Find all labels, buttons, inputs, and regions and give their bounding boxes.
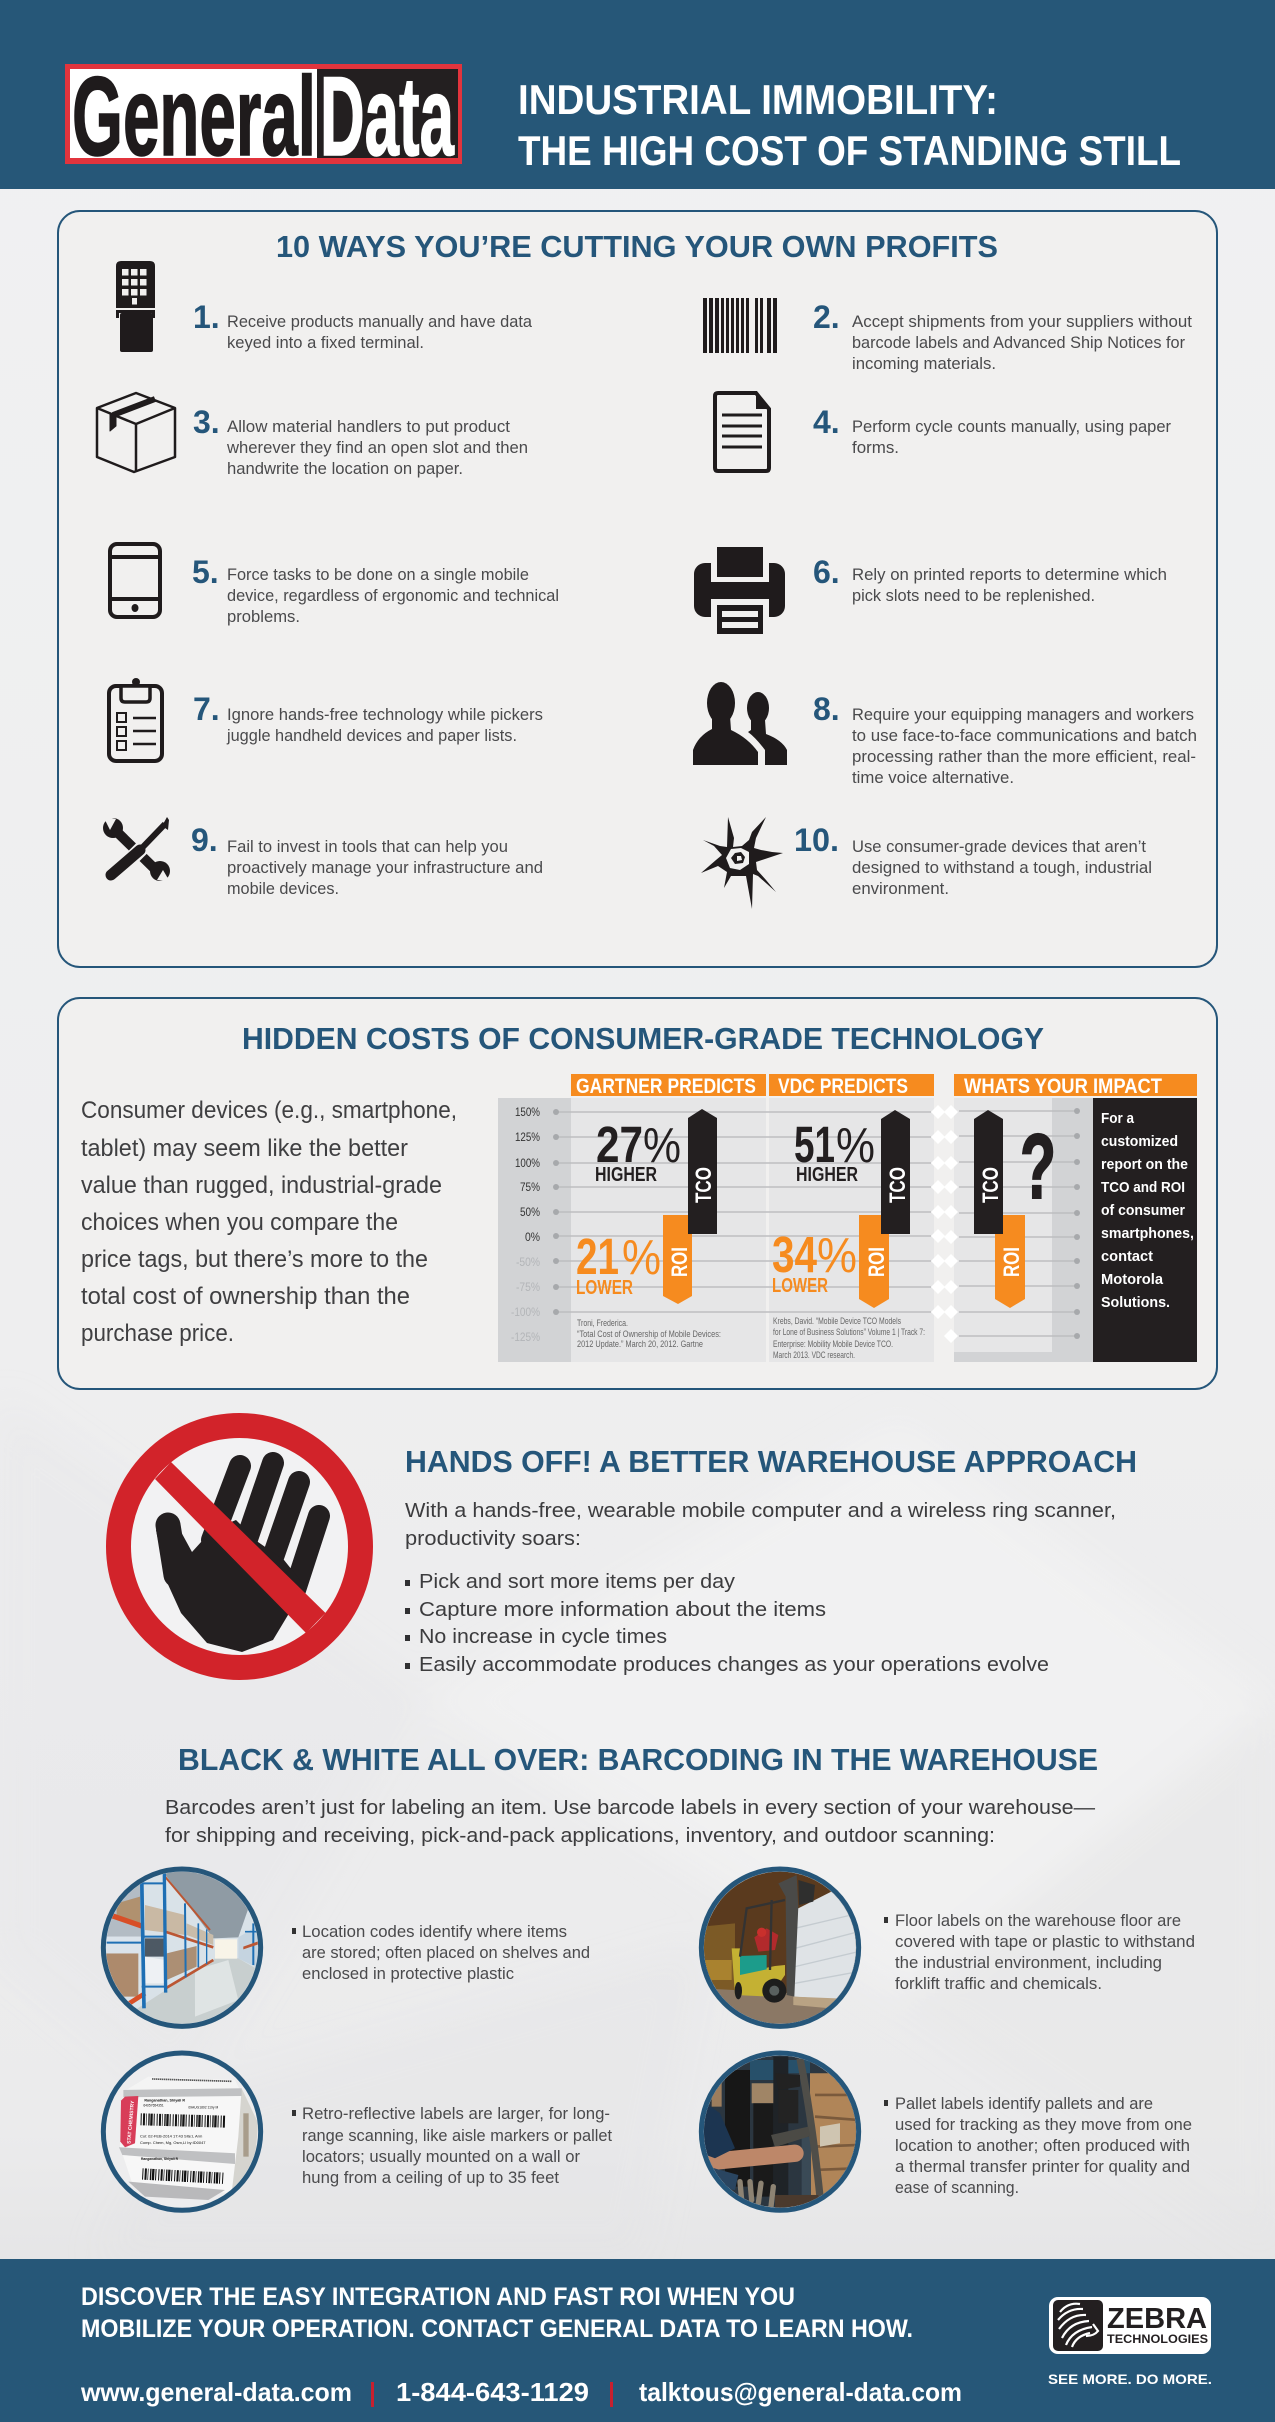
Gartner 27% higher: HIGHER [595,1164,657,1186]
item 3: Allow material handlers to put product [227,418,510,436]
text block: consumer devices [81,1097,457,1347]
icon: mobile device [110,544,160,617]
heading: hidden costs: HIDDEN COSTS OF CONSUMER-GRADE TECHNOLOGY [242,1021,1044,1056]
axis labels: 50% [520,1207,540,1219]
Gartner ROI bar: ROI [667,1247,692,1277]
VDC source: for Lone of Business Solutions” Volume 1 | Track 7: [773,1327,925,1338]
callout: customized report: contact [1101,1248,1153,1265]
VDC source [773,1316,925,1361]
Gartner TCO bar: TCO [691,1167,716,1203]
item 5: device, regardless of ergonomic and technical [227,587,559,605]
photo: barcode label roll: 09AUG1892 119y M [188,2105,218,2109]
VDC 51% higher: HIGHER [796,1164,858,1186]
logo: Zebra Technologies [1049,2297,1211,2354]
text block: consumer devices: tablet) may seem like the better [81,1135,408,1162]
icon: clipboard [109,678,162,761]
icon: box [97,393,175,472]
VDC 34% lower: % [817,1229,857,1283]
floor labels text [884,1912,1195,1993]
photo: warehouse aisle [103,1869,262,2027]
item 2: incoming materials. [852,355,996,373]
column headers: WHATS YOUR IMPACT [964,1075,1162,1098]
VDC source: Enterprise: Mobility Mobile Device TCO. [773,1339,893,1350]
item 3: handwrite the location on paper. [227,460,463,478]
contact details: 1-844-643-1129 [396,2377,589,2407]
bullet list: Easily accommodate produces changes as your operations evolve [419,1654,1049,1676]
photo: hand-held scanner [701,2053,859,2212]
VDC 51% higher: 51 [794,1116,835,1173]
Gartner 21% lower [576,1228,661,1299]
item 1 [193,299,533,352]
item 10: 10. [794,822,839,858]
ring [701,1869,859,2026]
section: hands off [118,1426,1137,1676]
text block: consumer devices: total cost of ownership than the [81,1283,410,1310]
photo: barcode label roll: 64057654351 [143,2104,164,2108]
callout: customized report: Solutions. [1101,1294,1170,1311]
item 4: forms. [852,439,899,457]
axis labels: 75% [520,1182,540,1194]
item 10: Use consumer-grade devices that aren’t [852,838,1146,856]
heading: 10 ways: 10 WAYS YOU’RE CUTTING YOUR OWN PROFITS [276,229,998,264]
call to action: DISCOVER THE EASY INTEGRATION AND FAST ROI WHEN YOU [81,2283,795,2311]
Gartner source: 2012 Update.” March 20, 2012. Gartne [577,1339,703,1350]
icon: fixed terminal [116,261,155,352]
text block: intro [405,1500,1116,1550]
Gartner ROI bar [663,1215,692,1304]
axis labels: -75% [516,1282,540,1294]
item 6: 6. [813,554,840,590]
chart: TCO and ROI comparison [498,1074,1197,1362]
pallet labels text: used for tracking as they move from one [895,2116,1192,2134]
panel: hidden costs [58,998,1217,1389]
column headers [571,1074,1197,1098]
logo: General Data: General [72,54,316,179]
item 9: mobile devices. [227,880,339,898]
text block: consumer devices: purchase price. [81,1320,234,1347]
item 8: time voice alternative. [852,769,1014,787]
VDC 34% lower [772,1226,857,1297]
floor labels text: forklift traffic and chemicals. [895,1975,1102,1993]
VDC ROI bar [859,1215,889,1308]
impact TCO bar [974,1110,1003,1234]
Gartner 27% higher: % [643,1119,681,1173]
impact ROI bar: ROI [999,1247,1024,1277]
axis labels: -50% [516,1257,540,1269]
floor labels text: Floor labels on the warehouse floor are [895,1912,1181,1930]
item 7: 7. [193,691,220,727]
floor labels text: covered with tape or plastic to withstand [895,1933,1195,1951]
item 3: wherever they find an open slot and then [226,439,528,457]
VDC ROI bar: ROI [864,1247,889,1277]
axis labels: 150% [515,1107,540,1119]
photo: barcode label roll: Ranganathan, Shiyali R [144,2099,185,2103]
ring [701,2053,859,2210]
pallet labels text [884,2095,1192,2197]
callout: customized report: For a [1101,1110,1135,1127]
item 10: environment. [852,880,949,898]
bullet list: Pick and sort more items per day [419,1571,735,1593]
Gartner 21% lower: % [622,1231,661,1285]
item 8: to use face-to-face communications and batch [852,727,1197,745]
panel: 10 ways [58,211,1217,967]
icon: zebra head [1058,2304,1098,2347]
bullet list: Capture more information about the items [419,1599,826,1621]
Gartner TCO bar [688,1109,717,1234]
axis labels: -125% [511,1332,540,1344]
item 7 [193,691,543,745]
text block: consumer devices: price tags, but there’s more to the [81,1246,428,1273]
photo: barcode label roll: Ranganathan, Shiyali R [141,2157,179,2161]
photo: barcode label roll: Col: 02-FEB-2014 17:43 Site:L Arm [140,2133,203,2138]
Gartner source: Troni, Frederica. [577,1318,628,1329]
bullet list: No increase in cycle times [419,1626,667,1648]
axis labels: 125% [515,1132,540,1144]
ring [103,1869,261,2026]
item 6: pick slots need to be replenished. [852,587,1095,605]
retro-reflective labels text: locators; usually mounted on a wall or [302,2148,581,2166]
item 5 [192,554,559,626]
photo: barcode label roll [103,2053,262,2212]
logo: Zebra Technologies: ZEBRA [1107,2303,1207,2335]
title: THE HIGH COST OF STANDING STILL [518,127,1181,174]
item 1: keyed into a fixed terminal. [227,334,424,352]
icon: no hands sign [118,1426,360,1668]
pallet labels text: ease of scanning. [895,2179,1019,2197]
text block: consumer devices: choices when you compare the [81,1209,398,1236]
item 9 [191,822,543,898]
heading: hands off: HANDS OFF! A BETTER WAREHOUSE APPROACH [405,1444,1137,1479]
item 7: Ignore hands-free technology while pickers [227,706,543,724]
text block: barcodes intro: Barcodes aren’t just for labeling an item. Use barcode labels in every section of your warehouse— [165,1797,1095,1819]
icon: tools [103,816,170,882]
item 10: designed to withstand a tough, industrial [852,859,1152,877]
item 2: barcode labels and Advanced Ship Notices for [852,334,1185,352]
icon: document [715,393,769,471]
logo: General Data: Data [320,54,454,179]
VDC 51% higher [794,1116,875,1186]
axis labels: 0% [525,1232,540,1244]
retro-reflective labels text: hung from a ceiling of up to 35 feet [302,2169,559,2187]
question mark: ? [1020,1116,1056,1218]
location codes text: enclosed in protective plastic [302,1965,514,1983]
Gartner 27% higher [595,1116,681,1186]
header band [0,0,1275,189]
item 8: processing rather than the more efficient, real- [852,748,1196,766]
icon: printer [694,547,785,634]
callout: customized report: Motorola [1101,1271,1164,1288]
contact details [80,2377,962,2407]
callout: customized report [1093,1098,1197,1362]
callout: customized report: customized [1101,1133,1178,1150]
item 4: 4. [813,404,840,440]
item 9: 9. [191,822,218,858]
item 5: problems. [227,608,300,626]
floor labels text: the industrial environment, including [895,1954,1162,1972]
location codes text: are stored; often placed on shelves and [302,1944,590,1962]
Gartner source: “Total Cost of Ownership of Mobile Devices: [577,1329,721,1340]
item 2: Accept shipments from your suppliers without [852,313,1192,331]
item 6 [813,554,1167,605]
retro-reflective labels text [292,2105,612,2187]
item 1: 1. [193,299,220,335]
text block: consumer devices: value than rugged, industrial-grade [81,1172,442,1199]
item 5: 5. [192,554,219,590]
Gartner 21% lower: LOWER [576,1277,633,1299]
title: INDUSTRIAL IMMOBILITY: [518,76,998,123]
VDC source: Krebs, David. “Mobile Device TCO Models [773,1316,901,1327]
axis labels: 100% [515,1158,540,1170]
VDC 34% lower: LOWER [772,1275,828,1297]
Gartner 27% higher: 27 [596,1116,643,1173]
Gartner 21% lower: 21 [576,1228,619,1285]
tagline: SEE MORE. DO MORE. [1048,2371,1212,2387]
bullet list [405,1571,1049,1676]
item 2: 2. [813,299,840,335]
item 7: juggle handheld devices and paper lists. [226,727,517,745]
pallet labels text: Pallet labels identify pallets and are [895,2095,1153,2113]
retro-reflective labels text: Retro-reflective labels are larger, for long- [302,2105,610,2123]
location codes text [292,1923,590,1983]
column headers: VDC PREDICTS [778,1075,908,1098]
item 6: Rely on printed reports to determine which [852,566,1167,584]
ring [103,2053,261,2210]
photo: barcode label roll: STAT CHEMISTRY [126,2100,136,2144]
callout: customized report: TCO and ROI [1101,1179,1185,1196]
call to action [81,2283,913,2343]
item 4: Perform cycle counts manually, using paper [852,418,1172,436]
VDC TCO bar [881,1110,910,1234]
Gartner source [577,1318,721,1350]
VDC TCO bar: TCO [885,1167,910,1203]
item 4 [813,404,1172,457]
logo: Zebra Technologies: TECHNOLOGIES [1107,2332,1208,2346]
axis labels [511,1107,540,1344]
VDC 34% lower: 34 [772,1226,817,1283]
item 3: 3. [193,404,220,440]
impact TCO bar: TCO [978,1167,1003,1203]
item 5: Force tasks to be done on a single mobile [227,566,529,584]
impact ROI bar [995,1215,1025,1308]
callout: customized report: report on the [1101,1156,1188,1173]
title [518,76,1181,174]
axis labels: -100% [511,1307,540,1319]
item 10 [794,822,1152,898]
icon: people [693,682,787,765]
item 1: Receive products manually and have data [227,313,533,331]
location codes text: Location codes identify where items [302,1923,567,1941]
VDC source: March 2013. VDC research. [773,1350,855,1361]
item 2 [813,299,1192,373]
item 8: 8. [813,691,840,727]
call to action: MOBILIZE YOUR OPERATION. CONTACT GENERAL DATA TO LEARN HOW. [81,2315,913,2343]
VDC 51% higher: % [836,1119,875,1173]
icon: cracked screen [701,817,783,909]
footer band [0,2259,1275,2422]
column headers: GARTNER PREDICTS [576,1075,756,1098]
section: barcoding [103,1742,1195,2212]
item 3 [193,404,528,478]
icon: barcode [703,298,777,353]
item 9: Fail to invest in tools that can help you [227,838,508,856]
contact details: talktous@general-data.com [639,2377,962,2407]
callout: customized report: smartphones, [1101,1225,1194,1242]
item 8: Require your equipping managers and workers [852,706,1194,724]
photo: barcode label roll: Comp. Chem, Mg, Osm,LI by:ID0047 [140,2140,206,2145]
contact details: www.general-data.com [80,2377,352,2407]
text block: intro: productivity soars: [405,1528,581,1550]
text block: consumer devices: Consumer devices (e.g., smartphone, [81,1097,457,1124]
item 8 [813,691,1197,787]
pallet labels text: location to another; often produced with [895,2137,1190,2155]
text block: barcodes intro [165,1797,1095,1847]
text block: intro: With a hands-free, wearable mobile computer and a wireless ring scanner, [405,1500,1116,1522]
callout: customized report: of consumer [1101,1202,1185,1219]
heading: barcoding: BLACK & WHITE ALL OVER: BARCODING IN THE WAREHOUSE [178,1742,1098,1777]
retro-reflective labels text: range scanning, like aisle markers or pallet [302,2127,612,2145]
photo: forklift [701,1869,859,2027]
text block: barcodes intro: for shipping and receiving, pick-and-pack applications, inventory, and outdoor scanning: [165,1825,995,1847]
pallet labels text: a thermal transfer printer for quality and [895,2158,1190,2176]
item 9: proactively manage your infrastructure and [227,859,543,877]
